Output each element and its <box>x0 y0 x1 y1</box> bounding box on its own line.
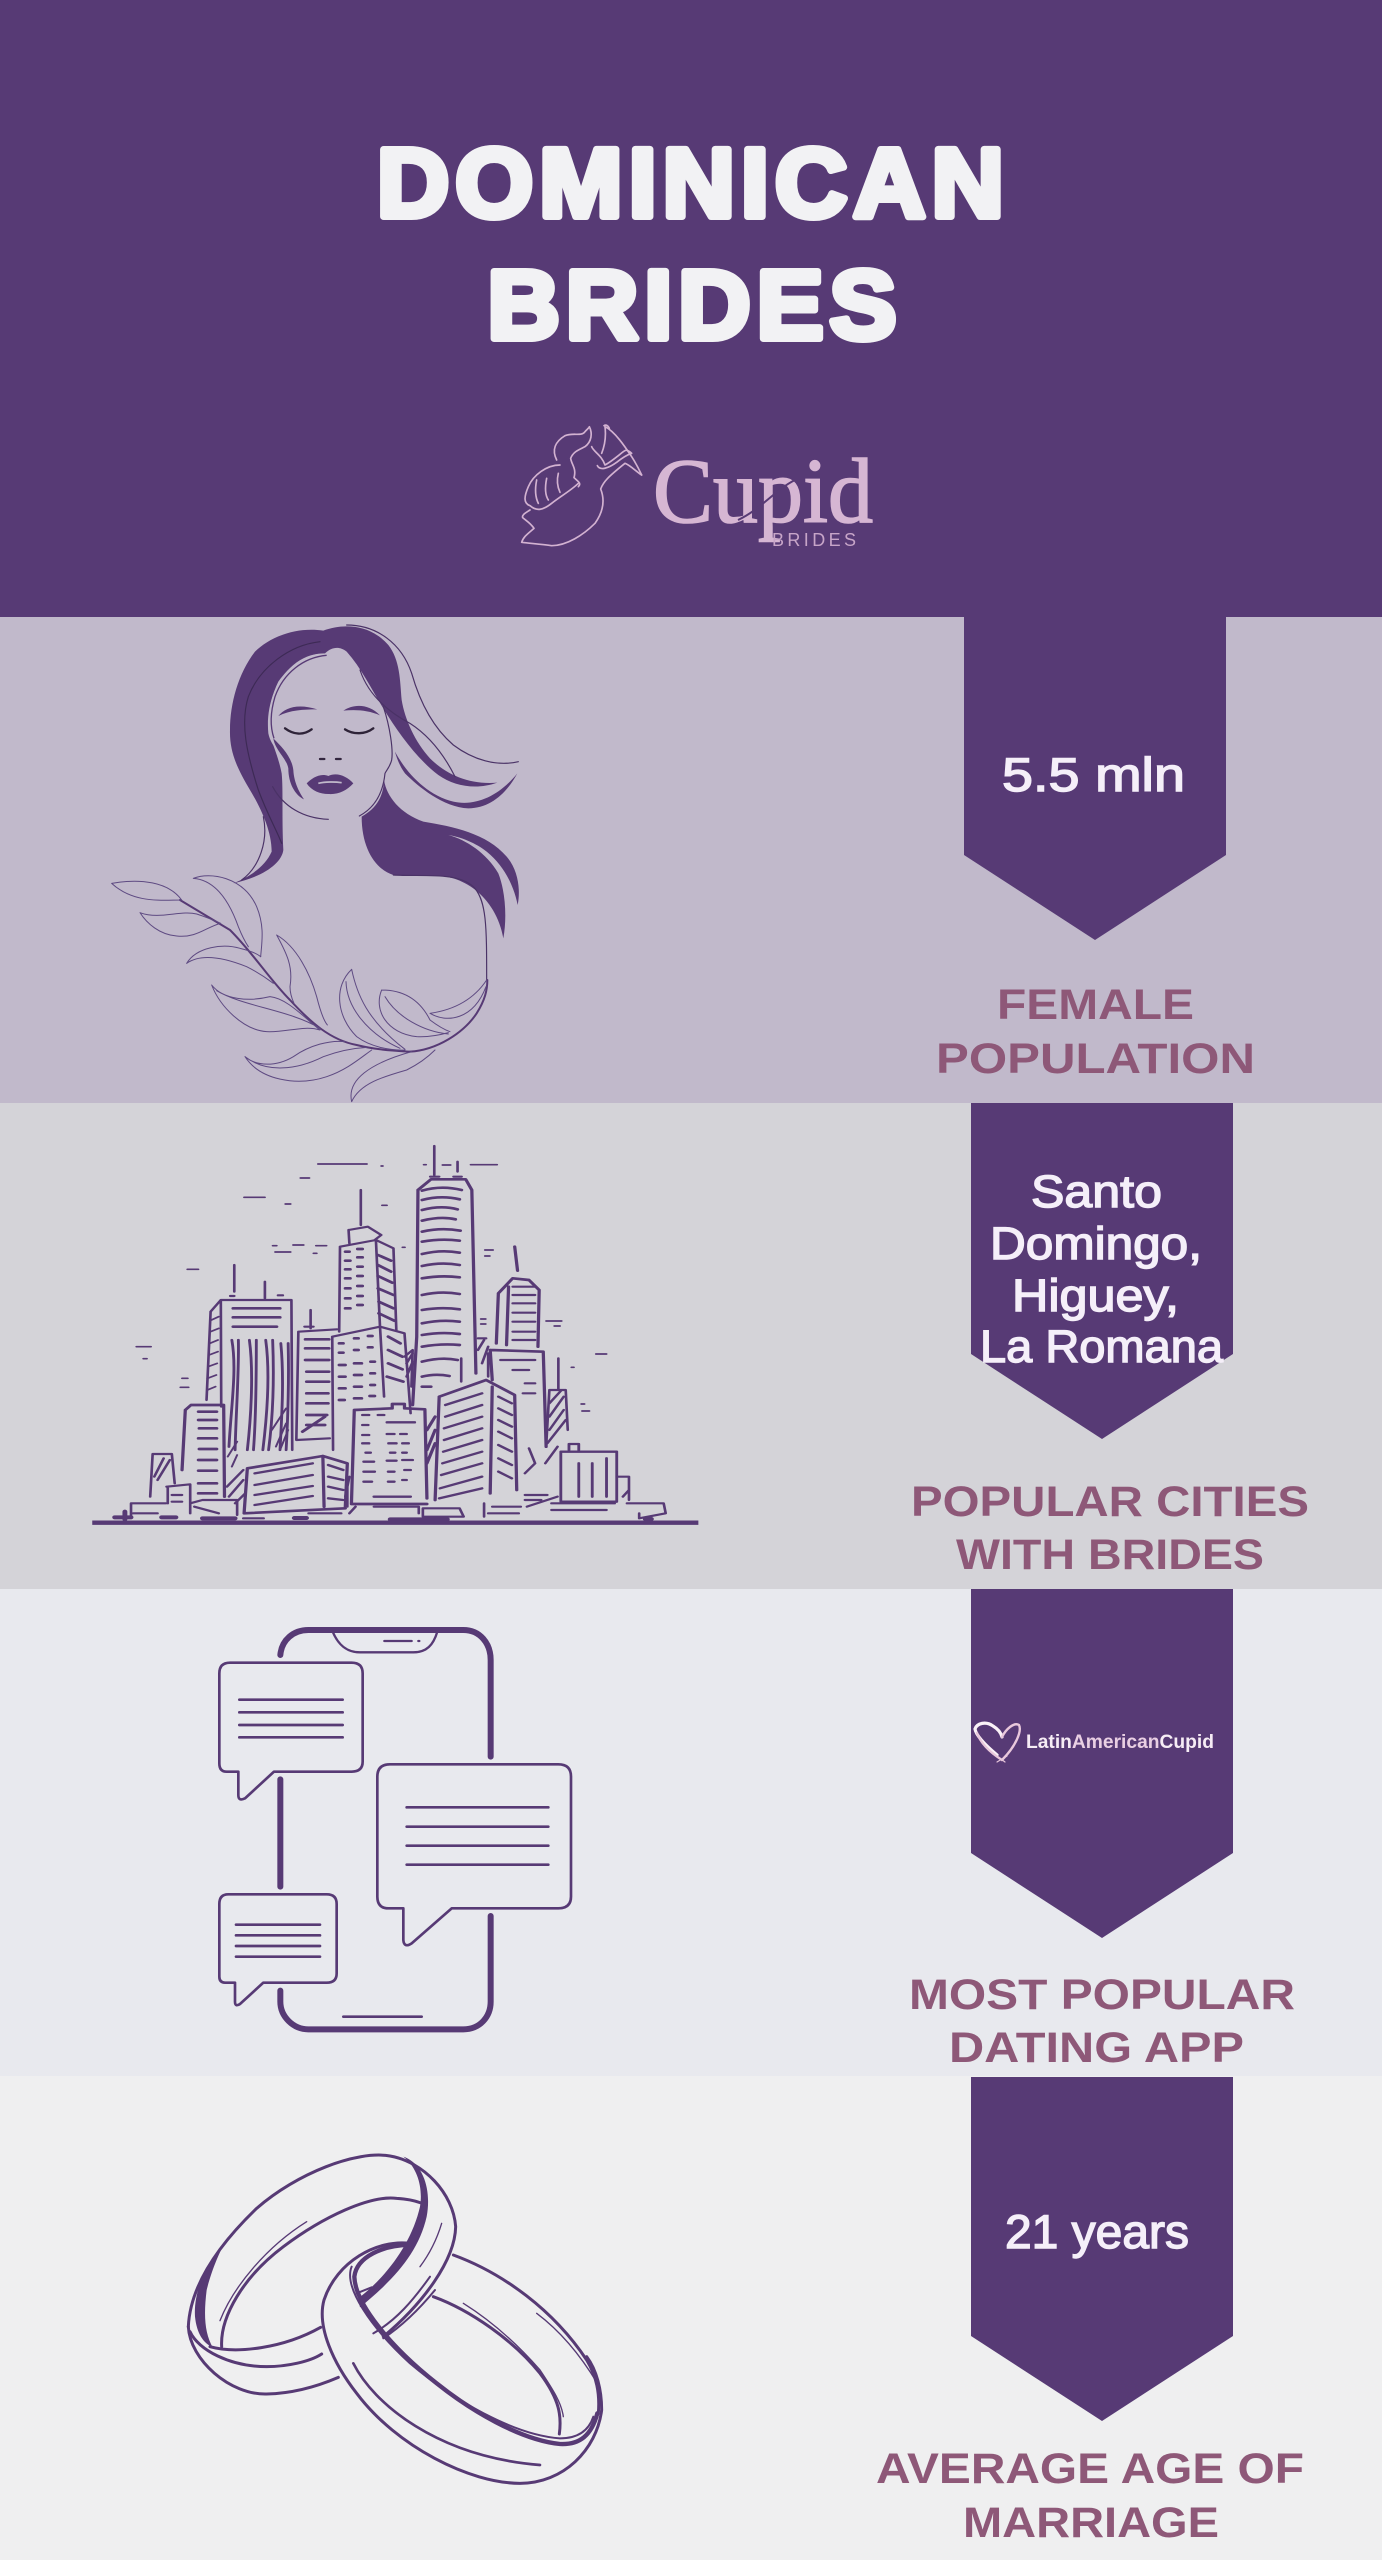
label: dating app: DATING APP <box>949 2024 1244 2072</box>
ribbon: 21 years: 21 years <box>1005 2205 1189 2258</box>
chat bubble 1 <box>219 1663 363 1799</box>
logo wordmark: Cupid <box>653 440 873 542</box>
label: age of marriage: MARRIAGE <box>963 2499 1219 2547</box>
ribbon: 5.5 mln <box>964 617 1226 940</box>
icon: heart logo <box>975 1723 1020 1762</box>
ribbon: 5.5 mln: 5.5 mln <box>1002 748 1185 801</box>
chat bubble 3 <box>219 1894 337 2005</box>
app name: LatinAmericanCupid <box>1026 1732 1214 1753</box>
front right building <box>435 1380 517 1500</box>
small left building <box>182 1405 224 1497</box>
phone notch <box>333 1632 437 1652</box>
ribbon: cities: Domingo, <box>990 1218 1202 1269</box>
label: female population: FEMALE <box>997 981 1194 1029</box>
ribbon: cities: La Romana <box>980 1321 1224 1372</box>
panel: popular cities <box>0 1103 1382 1589</box>
front low building <box>244 1456 347 1513</box>
home bar <box>343 2013 422 2021</box>
chat bubble 2 <box>377 1764 571 1945</box>
ribbon: LatinAmericanCupid <box>971 1589 1233 1938</box>
label: age of marriage: AVERAGE AGE OF <box>876 2445 1304 2493</box>
ribbon: 21 years <box>971 2077 1233 2421</box>
label: popular cities: WITH BRIDES <box>956 1531 1264 1579</box>
label: female population: POPULATION <box>936 1035 1255 1083</box>
ribbon: cities: Higuey, <box>1012 1270 1179 1321</box>
narrow middle building <box>296 1310 337 1440</box>
title: BRIDES <box>488 250 902 360</box>
front middle building <box>351 1404 435 1504</box>
ring right <box>322 2243 602 2483</box>
ground line <box>92 1516 698 1529</box>
phone outline <box>280 1630 491 2029</box>
icon: cupid figure <box>522 425 642 546</box>
illustration: phone with chat bubbles <box>219 1630 571 2029</box>
illustration: wedding rings <box>188 2155 602 2483</box>
upper tower <box>339 1190 396 1332</box>
logo: Cupid Brides <box>522 425 873 550</box>
illustration: city skyline <box>92 1146 698 1523</box>
right cylinder tower <box>496 1247 539 1347</box>
ribbon: cities <box>971 1103 1233 1439</box>
logo swash <box>738 480 795 520</box>
ribbon: cities: Santo <box>1031 1166 1162 1217</box>
right low building <box>561 1444 617 1502</box>
panel: dating app <box>0 1589 1382 2076</box>
right mid building <box>490 1350 546 1447</box>
ring left <box>188 2155 456 2394</box>
tower base <box>332 1327 413 1450</box>
panel: age of marriage <box>0 2076 1382 2560</box>
panel: header <box>0 0 1382 617</box>
ground clutter <box>133 1503 521 1518</box>
title <box>377 128 1010 360</box>
panel: female population <box>0 617 1382 1103</box>
tall left building <box>207 1300 292 1450</box>
label: dating app: MOST POPULAR <box>909 1971 1295 2019</box>
title: DOMINICAN <box>377 128 1010 238</box>
illustration: woman with leaves <box>112 625 519 1102</box>
logo sub-word: BRIDES <box>772 530 856 550</box>
label: popular cities: POPULAR CITIES <box>911 1478 1309 1526</box>
sky dashes <box>136 1164 607 1411</box>
tall cylinder tower <box>413 1179 476 1405</box>
